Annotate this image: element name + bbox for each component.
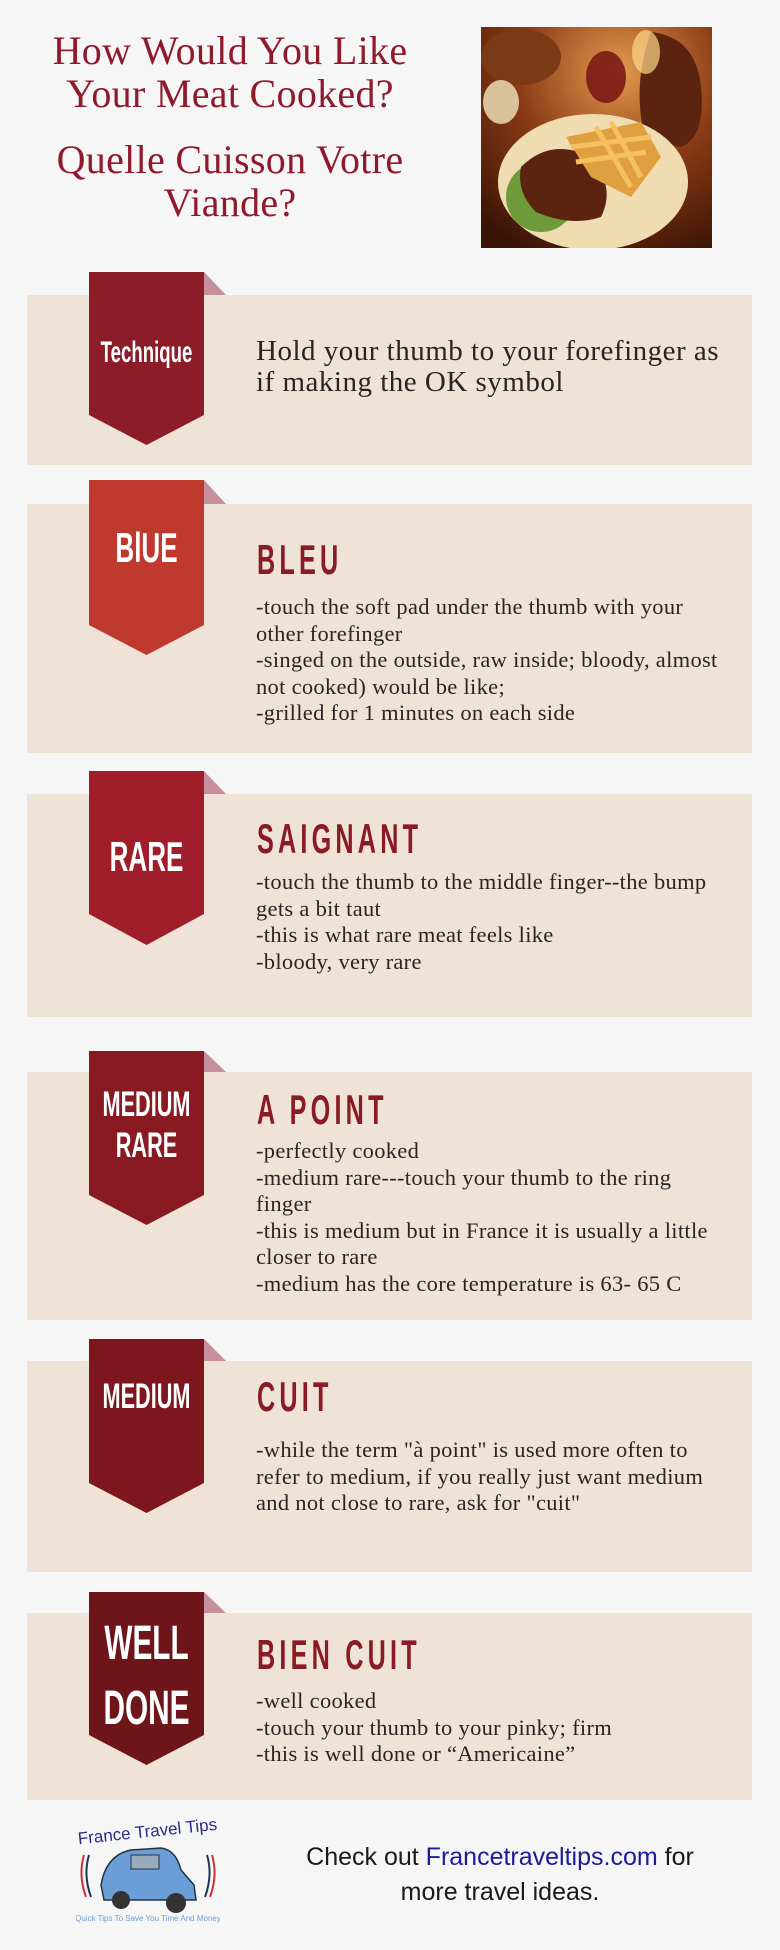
text: technique — [256, 335, 719, 398]
title: Your Meat Cooked? — [66, 71, 394, 116]
title — [53, 28, 407, 225]
text: bien cuit: -well cooked — [256, 1688, 376, 1713]
panel: technique — [27, 295, 752, 465]
text: cuit: and not close to rare, ask for "cuit" — [256, 1490, 580, 1515]
heading: a point: A POINT — [257, 1086, 388, 1133]
panel: cuit — [27, 1361, 752, 1572]
panel: bien cuit — [27, 1613, 752, 1800]
ribbon: rare: RARE — [110, 833, 183, 880]
text: saignant: -touch the thumb to the middle finger--the bump — [256, 869, 706, 894]
panel: a point — [27, 1072, 752, 1320]
text: saignant: -bloody, very rare — [256, 948, 422, 974]
heading: cuit: CUIT — [257, 1373, 333, 1420]
text: saignant: -this is what rare meat feels like — [256, 922, 554, 947]
text: saignant — [256, 869, 706, 974]
footer text: more travel ideas. — [401, 1878, 599, 1906]
text: a point: -medium rare---touch your thumb to the ring — [256, 1164, 671, 1190]
ribbon: well done: DONE — [104, 1682, 189, 1735]
text: cuit — [256, 1437, 703, 1515]
ribbon: medium rare: MEDIUM — [102, 1085, 191, 1124]
text: a point: finger — [256, 1191, 312, 1216]
title: Quelle Cuisson Votre — [57, 137, 403, 182]
ribbon: technique: Technique — [101, 336, 192, 369]
logo: france travel tips: France Travel Tips — [77, 1815, 218, 1848]
text: cuit: -while the term "à point" is used more often to — [256, 1437, 688, 1462]
panel: bleu — [27, 504, 752, 753]
text: bleu: other forefinger — [256, 620, 403, 646]
heading: bleu: BLEU — [257, 536, 342, 583]
text: bleu: not cooked) would be like; — [256, 674, 505, 698]
text: a point: -perfectly cooked — [256, 1138, 419, 1163]
text: bien cuit — [256, 1688, 612, 1766]
text: technique: if making the OK symbol — [256, 366, 564, 398]
text: a point: closer to rare — [256, 1244, 378, 1269]
ribbon: blue: BlUE — [115, 524, 178, 571]
footer text: Check out Francetraveltips.com for — [306, 1843, 694, 1871]
text: a point — [256, 1138, 708, 1296]
photo: steak frites — [481, 27, 712, 248]
panel: saignant — [27, 794, 752, 1017]
heading: saignant: SAIGNANT — [257, 815, 422, 862]
text: bleu: -grilled for 1 minutes on each side — [256, 700, 575, 725]
ribbon: medium rare — [89, 1051, 226, 1225]
ribbon: rare — [89, 771, 226, 945]
text: technique: Hold your thumb to your forefinger as — [256, 335, 719, 367]
text: a point: -this is medium but in France it is usually a little — [256, 1218, 708, 1242]
text: bleu: -singed on the outside, raw inside; bloody, almost — [256, 647, 718, 672]
logo: france travel tips: Quick Tips To Save You Time And Money — [76, 1914, 220, 1923]
text: cuit: refer to medium, if you really just want medium — [256, 1464, 703, 1488]
ribbon: medium rare: RARE — [116, 1126, 177, 1165]
ribbon: blue — [89, 480, 226, 655]
text: a point: -medium has the core temperature is 63- 65 C — [256, 1270, 682, 1296]
text: bleu — [256, 594, 718, 725]
text: saignant: gets a bit taut — [256, 896, 381, 920]
logo: france travel tips — [76, 1815, 220, 1923]
text: bleu: -touch the soft pad under the thumb with your — [256, 594, 683, 619]
ribbon: well done: WELL — [104, 1617, 189, 1670]
ribbon: technique — [89, 272, 226, 445]
heading: bien cuit: BIEN CUIT — [257, 1631, 421, 1678]
title: How Would You Like — [53, 28, 407, 73]
text: bien cuit: -this is well done or “Americaine” — [256, 1741, 575, 1766]
text: bien cuit: -touch your thumb to your pinky; firm — [256, 1714, 612, 1740]
ribbon: medium: MEDIUM — [102, 1377, 191, 1416]
ribbon: medium — [89, 1339, 226, 1513]
footer text — [306, 1843, 694, 1906]
ribbon: well done — [89, 1592, 226, 1765]
title: Viande? — [164, 180, 296, 225]
